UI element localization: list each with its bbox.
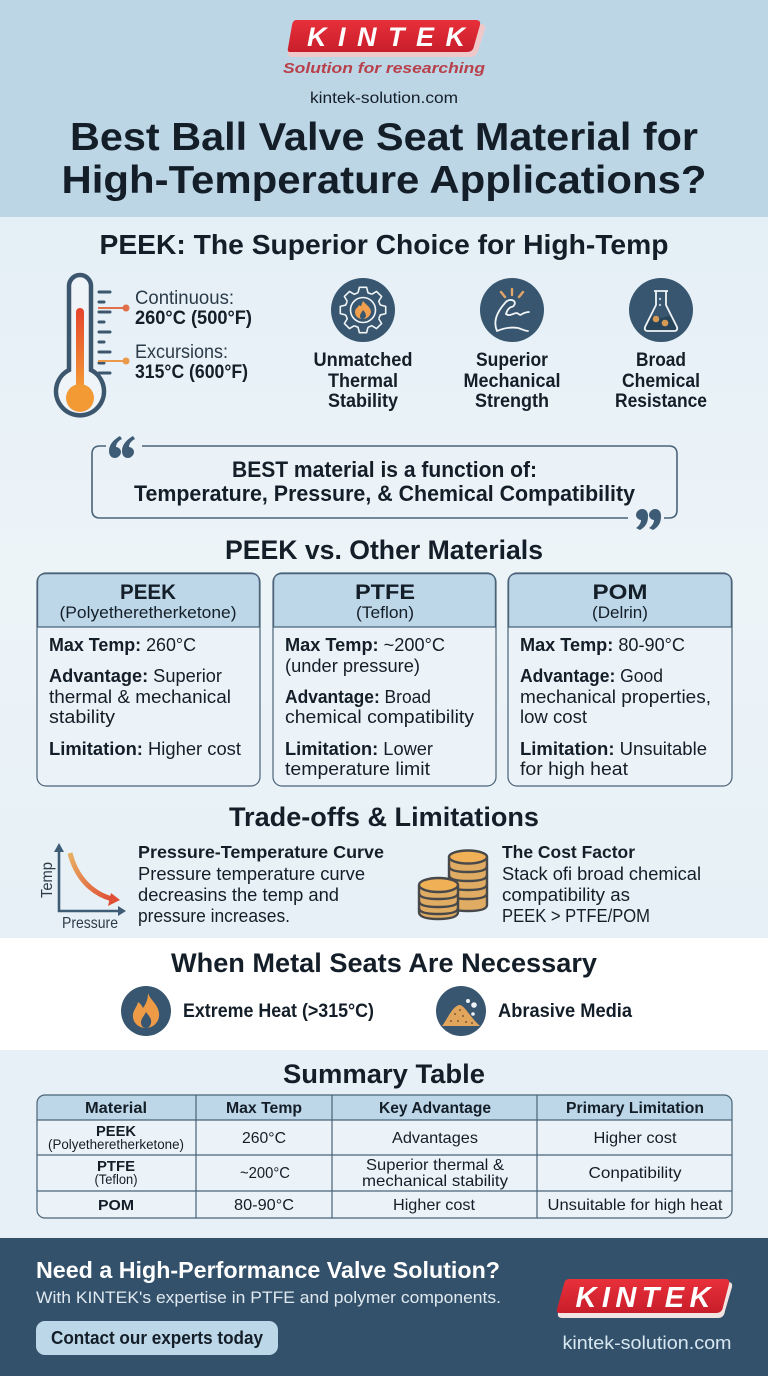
label: thermal stability: Stability [328, 391, 398, 412]
label: chemical resistance: Broad [636, 350, 686, 371]
table row: PEEK: (Polyetheretherketone) [48, 1137, 184, 1152]
label: mechanical strength: Superior [476, 350, 549, 371]
icon: abrasive pile [436, 986, 486, 1036]
table row: POM: Higher cost [393, 1197, 476, 1214]
panel: metal seats [0, 938, 768, 1050]
table header: Material [85, 1100, 147, 1117]
card title: PEEK [120, 581, 176, 604]
card title [592, 581, 648, 622]
logo: KINTEK: KINTEK [307, 22, 468, 52]
card title: POM [592, 581, 648, 604]
title: High-Temperature Applications? [62, 159, 706, 202]
panel: summary section background [0, 1050, 768, 1238]
table row: PTFE: (Teflon) [94, 1172, 138, 1187]
logo: footer KINTEK: KINTEK [576, 1282, 713, 1314]
chart: pressure-temperature curve [39, 843, 126, 932]
heading: summary table: Summary Table [283, 1059, 485, 1089]
label: chemical resistance: Resistance [615, 391, 707, 412]
heading: metal seats: When Metal Seats Are Necessary [171, 948, 597, 978]
label: extreme heat: Extreme Heat (>315°C) [183, 1001, 374, 1022]
table: summary [37, 1095, 732, 1218]
card title: PTFE [355, 581, 415, 604]
card details [520, 635, 711, 779]
table row: PTFE [94, 1157, 682, 1190]
table row: PTFE: PTFE [97, 1158, 135, 1175]
header band [0, 0, 768, 217]
heading: PEEK superior choice: PEEK: The Superior Choice for High-Temp [100, 229, 669, 260]
button: contact [36, 1321, 278, 1355]
card title: (Polyetheretherketone) [60, 603, 236, 622]
title: Best Ball Valve Seat Material for [70, 116, 698, 159]
card title: (Delrin) [592, 603, 648, 622]
website url: kintek-solution.com [562, 1332, 732, 1353]
table header: Key Advantage [379, 1100, 491, 1117]
text: temperature ratings: 260°C (500°F) [135, 308, 252, 329]
label: thermal stability: Unmatched [314, 350, 412, 371]
heading: PEEK vs others: PEEK vs. Other Materials [225, 535, 543, 565]
table row: PTFE: ~200°C [240, 1165, 290, 1182]
callout text: BEST material is a function of: [232, 457, 537, 482]
footer heading: Need a High-Performance Valve Solution? [36, 1257, 500, 1283]
card details: Max Temp: ~200°C [285, 635, 445, 655]
table row: PTFE: Superior thermal & [366, 1157, 504, 1174]
table row: POM: Unsuitable for high heat [548, 1197, 723, 1214]
label: mechanical strength [464, 350, 560, 412]
panel: footer [0, 1238, 768, 1376]
icon: flame [121, 986, 171, 1036]
chart: pressure-temperature curve: Temp [39, 862, 56, 898]
callout text: Temperature, Pressure, & Chemical Compatibility [134, 481, 636, 506]
table row: PTFE: Conpatibility [588, 1165, 682, 1182]
icon: flexed arm [480, 278, 544, 342]
text: pressure-temperature description: Pressure-Temperature Curve [138, 842, 384, 862]
button: contact: Contact our experts today [51, 1328, 263, 1348]
panel: PEEK card [37, 573, 260, 786]
feature: chemical resistance [615, 278, 707, 412]
text: cost factor description: compatibility as [502, 885, 630, 905]
table header: Primary Limitation [566, 1100, 704, 1117]
icon: flask [629, 278, 693, 342]
logo: KINTEK: Solution for researching [283, 60, 485, 77]
card details: (under pressure) [285, 656, 420, 676]
chart: pressure-temperature curve: Pressure [62, 915, 118, 932]
card details: Max Temp: 80-90°C [520, 635, 685, 655]
label: chemical resistance [615, 350, 707, 412]
footer text: With KINTEK's expertise in PTFE and polymer components. [36, 1288, 501, 1307]
panel: PTFE card [273, 573, 496, 786]
card details: Max Temp: 260°C [49, 635, 196, 655]
icon: opening quote [109, 436, 135, 458]
text: temperature ratings: Continuous: [135, 288, 234, 309]
card title [355, 581, 415, 622]
panel: main body background [0, 217, 768, 938]
text: pressure-temperature description: decreasins the temp and [138, 885, 339, 905]
text: pressure-temperature description [138, 842, 384, 926]
table row: POM [98, 1197, 723, 1214]
card details [285, 635, 474, 779]
card details: for high heat [520, 759, 628, 779]
icon: closing quote [636, 509, 661, 530]
heading: trade-offs: Trade-offs & Limitations [229, 802, 539, 832]
text: pressure-temperature description: pressure increases. [138, 906, 290, 926]
card details [49, 635, 241, 759]
table row: POM: 80-90°C [234, 1197, 294, 1214]
text: cost factor description: PEEK > PTFE/POM [502, 906, 650, 926]
title [62, 116, 706, 202]
table row: PEEK: 260°C [242, 1130, 286, 1147]
card details: Advantage: Superior [49, 666, 222, 686]
label: mechanical strength: Mechanical [464, 371, 560, 392]
text: cost factor description: Stack ofi broad chemical [502, 864, 701, 884]
text: temperature ratings: Excursions: [135, 342, 228, 363]
table row: PEEK: Higher cost [594, 1130, 677, 1147]
table row: PEEK: PEEK [96, 1123, 136, 1140]
card details: mechanical properties, [520, 687, 711, 707]
text: cost factor description: The Cost Factor [502, 842, 635, 862]
card details: low cost [520, 707, 587, 727]
table header: Max Temp [226, 1100, 302, 1117]
card title [60, 581, 236, 622]
callout text [134, 457, 636, 506]
card details: thermal & mechanical [49, 687, 231, 707]
card details: temperature limit [285, 759, 430, 779]
text: cost factor description [502, 842, 701, 926]
panel: POM card [508, 573, 732, 786]
logo: KINTEK [283, 20, 485, 77]
icon: thermometer [56, 275, 130, 415]
label: abrasive media: Abrasive Media [498, 1001, 632, 1022]
card details: chemical compatibility [285, 707, 474, 727]
table row: PEEK [48, 1123, 677, 1152]
text: temperature ratings: 315°C (600°F) [135, 362, 248, 383]
card details: Advantage: Good [520, 666, 663, 686]
card details: stability [49, 707, 115, 727]
icon: coin stacks [419, 850, 487, 919]
icon: gear with flame [331, 278, 395, 342]
card title: (Teflon) [356, 603, 414, 622]
card details: Limitation: Unsuitable [520, 739, 707, 759]
feature: mechanical strength [464, 278, 560, 412]
label: thermal stability [314, 350, 412, 412]
callout: best material [92, 436, 677, 530]
label: chemical resistance: Chemical [622, 371, 700, 392]
table row: PEEK: Advantages [392, 1130, 478, 1147]
feature: thermal stability [314, 278, 412, 412]
website url: kintek-solution.com [310, 90, 458, 107]
table row: PTFE: mechanical stability [362, 1173, 508, 1190]
card details: Limitation: Higher cost [49, 739, 241, 759]
label: thermal stability: Thermal [328, 371, 398, 392]
card details: Limitation: Lower [285, 739, 433, 759]
table row: POM: POM [98, 1197, 134, 1214]
text: temperature ratings [135, 288, 252, 383]
card details: Advantage: Broad [285, 687, 431, 707]
text: pressure-temperature description: Pressure temperature curve [138, 864, 365, 884]
table header [85, 1100, 704, 1117]
label: mechanical strength: Strength [475, 391, 549, 412]
logo: footer KINTEK [557, 1279, 732, 1318]
